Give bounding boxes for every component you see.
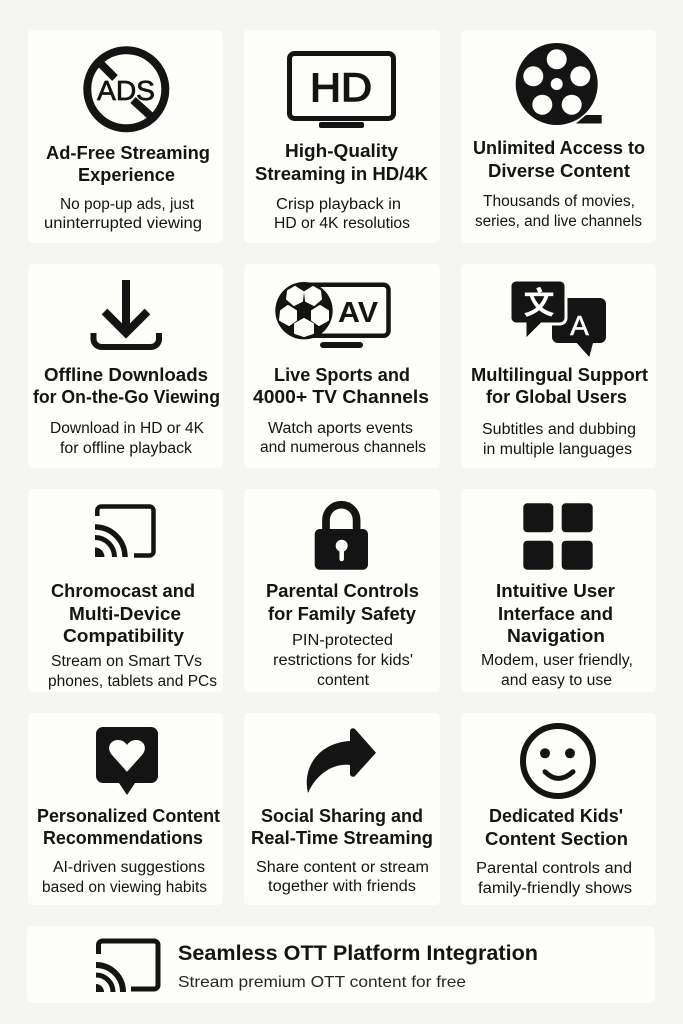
heading: Social Sharing and [261, 805, 423, 826]
icon: cast [96, 941, 158, 992]
icon: download [94, 280, 159, 347]
panel: OTT integration banner [27, 926, 655, 1003]
description: Watch aports events [268, 420, 413, 437]
icon: translation bubbles: 文 [524, 286, 554, 321]
icon: no ads [87, 50, 165, 128]
heading: Recommendations [43, 827, 203, 848]
description: uninterrupted viewing [44, 215, 202, 232]
heading [37, 805, 220, 848]
icon: share arrow [307, 728, 376, 793]
description [476, 860, 632, 897]
heading: High-Quality [285, 140, 399, 161]
description: for offline playback [60, 440, 192, 457]
description: based on viewing habits [42, 879, 207, 896]
heading [251, 805, 433, 848]
heading: Ad-Free Streaming [46, 142, 210, 163]
panel: unlimited access [461, 30, 656, 243]
icon: soccer ball and AV screen: AV [338, 297, 379, 329]
heading: Diverse Content [488, 160, 630, 181]
heading: for Family Safety [268, 603, 417, 624]
heading [46, 142, 210, 185]
description: series, and live channels [475, 213, 642, 230]
heading [253, 364, 429, 407]
description: content [317, 672, 370, 689]
description [44, 196, 202, 232]
heading [266, 580, 419, 624]
description [274, 196, 410, 232]
description: together with friends [268, 878, 416, 895]
icon: heart bubble [96, 727, 158, 795]
description: Subtitles and dubbing [482, 421, 636, 438]
icon: no ads: ADS [97, 75, 155, 106]
description [256, 859, 429, 895]
panel: chromecast [28, 489, 223, 692]
description: Stream premium OTT content for free [178, 974, 466, 991]
panel: intuitive interface [461, 489, 656, 692]
heading: Interface and [498, 603, 613, 624]
description: Crisp playback in [276, 196, 401, 213]
heading: Intuitive User [496, 580, 615, 601]
heading: Real-Time Streaming [251, 827, 433, 848]
description: No pop-up ads, just [60, 196, 195, 213]
description: Parental controls and [476, 860, 632, 877]
icon: smiley [523, 726, 593, 796]
icon: padlock [315, 505, 368, 570]
heading: for Global Users [486, 386, 627, 407]
icon: translation bubbles: A [570, 310, 589, 341]
description: Stream on Smart TVs [51, 653, 202, 670]
heading: Seamless OTT Platform Integration [178, 942, 538, 965]
heading: Streaming in HD/4K [255, 163, 429, 184]
heading: Compatibility [63, 625, 185, 646]
description: Modem, user friendly, [481, 652, 633, 669]
heading: for On-the-Go Viewing [33, 386, 220, 407]
heading: Navigation [507, 625, 605, 646]
icon: grid [523, 503, 593, 570]
heading: Live Sports and [274, 364, 410, 385]
description: Share content or stream [256, 859, 429, 876]
heading: Unlimited Access to [473, 137, 645, 158]
description: family-friendly shows [478, 880, 632, 897]
description: Thousands of movies, [483, 193, 635, 210]
description [482, 421, 636, 458]
panel: offline downloads [28, 264, 223, 468]
heading: Offline Downloads [44, 364, 208, 385]
heading [51, 580, 195, 646]
panel: personalized recommendations [28, 713, 223, 905]
panel: parental controls [244, 489, 440, 692]
description [48, 653, 217, 690]
description: HD or 4K resolutios [274, 215, 410, 232]
panel: high quality streaming [244, 30, 440, 243]
description [42, 859, 207, 896]
icon: soccer ball and AV screen [275, 282, 388, 348]
heading [471, 364, 648, 407]
description [475, 193, 642, 230]
heading: 4000+ TV Channels [253, 386, 429, 407]
icon: HD screen: HD [310, 66, 372, 110]
description [260, 420, 426, 456]
heading: Personalized Content [37, 805, 220, 826]
icon: cast [95, 506, 154, 557]
description: phones, tablets and PCs [48, 673, 217, 690]
description [50, 420, 205, 457]
description: in multiple languages [483, 441, 632, 458]
heading: Dedicated Kids' [489, 805, 623, 826]
heading: Parental Controls [266, 580, 419, 601]
heading: Experience [78, 164, 175, 185]
description: and easy to use [501, 672, 612, 689]
icon: film reel [516, 43, 602, 125]
icon: HD screen [290, 54, 394, 128]
heading: Multi-Device [69, 603, 181, 624]
description: PIN-protected [292, 632, 393, 649]
icon: translation bubbles [510, 280, 606, 357]
heading [33, 364, 220, 407]
description [273, 632, 413, 689]
panel: live sports [244, 264, 440, 468]
heading [496, 580, 615, 646]
heading [473, 137, 645, 181]
description: restrictions for kids' [273, 652, 413, 669]
panel: social sharing [244, 713, 440, 905]
heading: Chromocast and [51, 580, 195, 601]
description: and numerous channels [260, 439, 426, 456]
description: Download in HD or 4K [50, 420, 205, 437]
description: AI-driven suggestions [53, 859, 205, 876]
panel: ad-free streaming [28, 30, 223, 243]
panel: multilingual support [461, 264, 656, 468]
heading: Content Section [485, 828, 628, 849]
description [481, 652, 633, 689]
heading: Multilingual Support [471, 364, 648, 385]
panel: kids section [461, 713, 656, 905]
heading [255, 140, 429, 184]
heading [485, 805, 628, 849]
